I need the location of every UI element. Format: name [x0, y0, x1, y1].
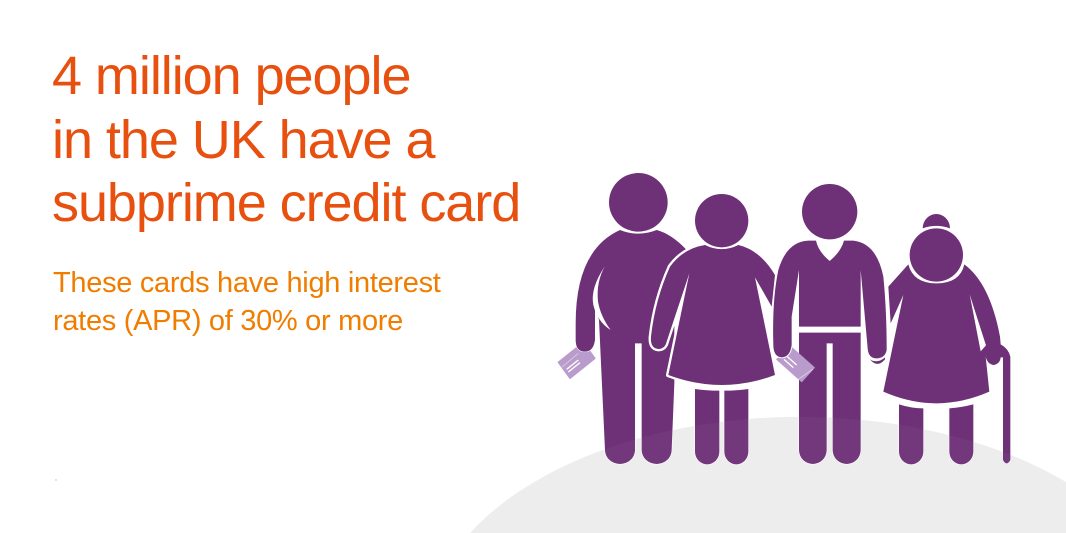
- heading: subprime credit card: [52, 173, 520, 233]
- heading: 4 million people: [52, 46, 410, 106]
- woman head: [695, 194, 748, 247]
- person 1: man with credit card: [558, 173, 687, 464]
- person 2: woman in dress: [651, 194, 775, 464]
- woman dress and arms: [651, 245, 775, 385]
- woman legs: [695, 389, 748, 464]
- man 3 trousers: [799, 333, 861, 464]
- grandmother hair bun: [923, 214, 950, 228]
- man 1 arm gap: [593, 266, 611, 330]
- icon: credit card left: [558, 342, 595, 378]
- icon: credit card right: [777, 347, 814, 382]
- grandmother head: [910, 228, 963, 282]
- heading: in the UK have a: [52, 110, 434, 170]
- man 3 sweater: [773, 241, 887, 358]
- grandmother legs: [899, 404, 973, 464]
- subheading: [53, 267, 441, 337]
- tiny mark: [55, 479, 57, 481]
- grandmother hand crescent: [870, 357, 885, 364]
- grandmother arm gap: [970, 294, 986, 351]
- grey hill: [470, 417, 1066, 533]
- person 4: older woman with walking stick: [870, 214, 1010, 464]
- man 1 body: [576, 230, 687, 464]
- man 3 head: [802, 184, 857, 239]
- grandmother dress, arms and cane: [883, 264, 1010, 463]
- subheading: rates (APR) of 30% or more: [53, 305, 403, 337]
- man 1 head: [609, 173, 668, 232]
- person 3: man in v-neck with credit card: [773, 184, 887, 464]
- heading: [52, 46, 520, 233]
- subheading: These cards have high interest: [53, 267, 441, 299]
- hill tint over figures: [470, 417, 1066, 533]
